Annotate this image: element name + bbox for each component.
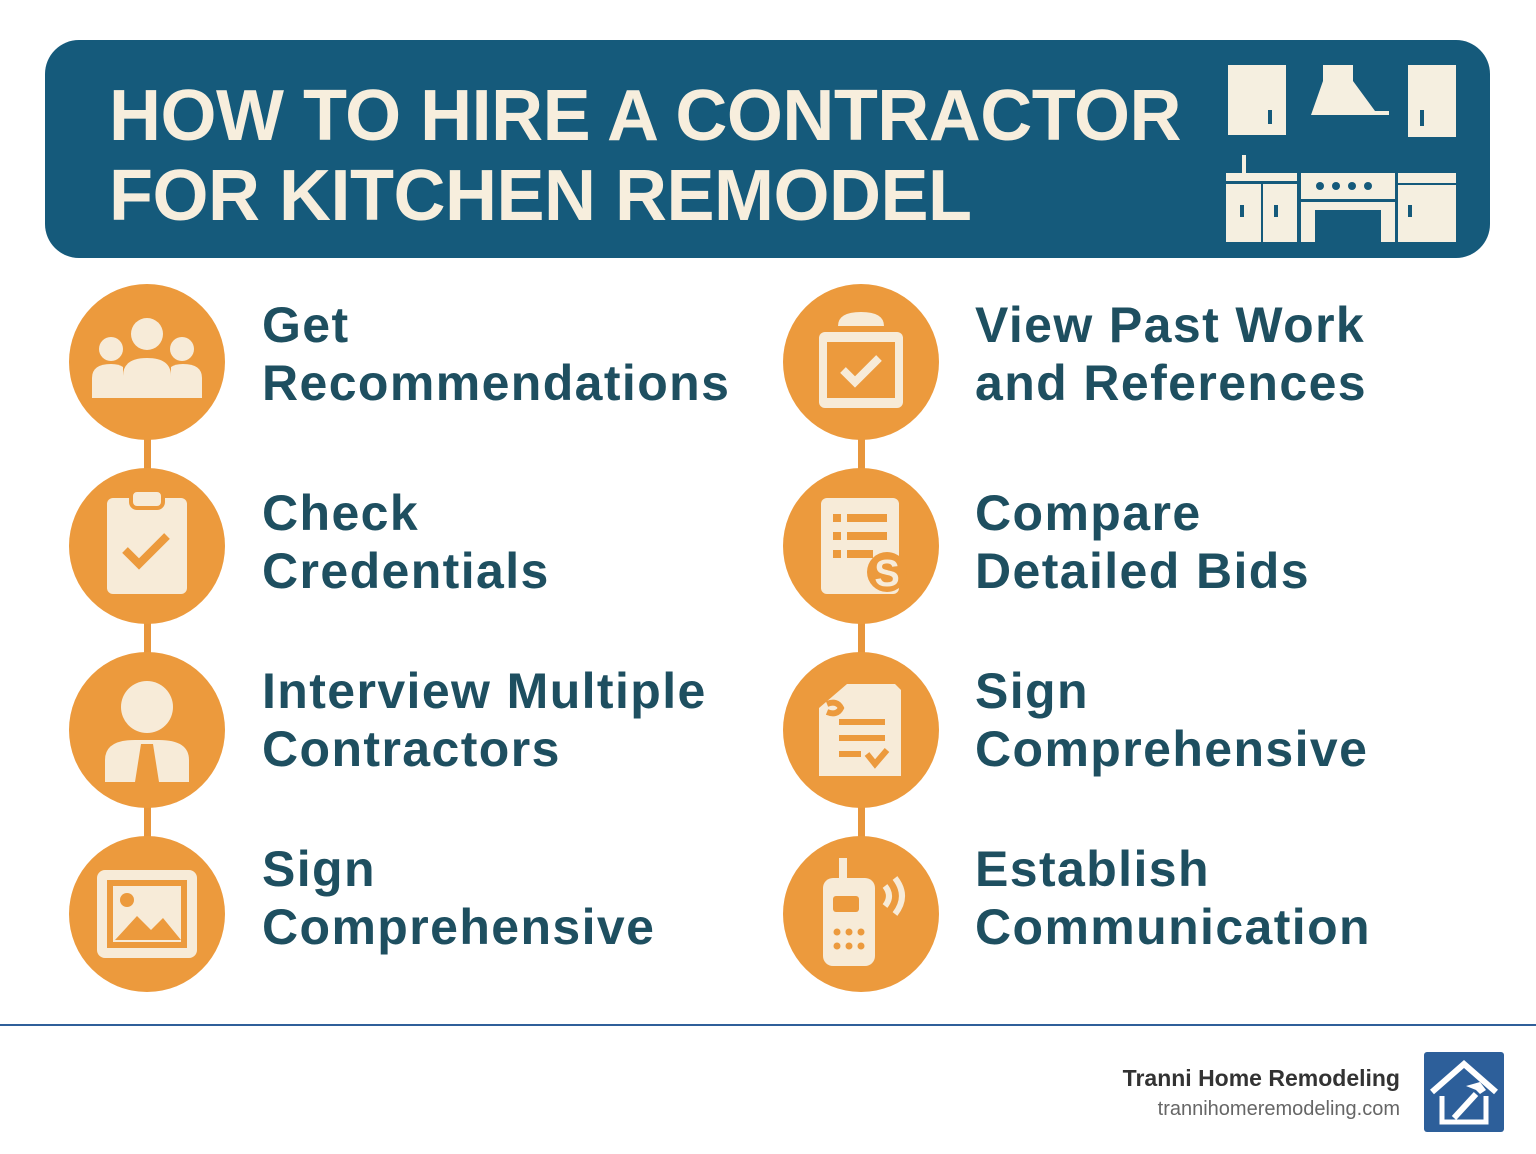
step 8 icon: radio <box>783 836 939 992</box>
step 2 icon: clipboard check <box>69 468 225 624</box>
header banner <box>45 40 1490 258</box>
step 4 text <box>262 841 655 955</box>
step 4 icon: picture <box>69 836 225 992</box>
step 8 text: Establish <box>975 841 1210 897</box>
step 6 icon: bid list <box>783 468 939 624</box>
step 7 text: Comprehensive <box>975 721 1368 777</box>
footer brand text: Tranni Home Remodeling <box>1123 1065 1400 1091</box>
step 4 text: Comprehensive <box>262 899 655 955</box>
step 8 text: Communication <box>975 899 1371 955</box>
step 6 icon: bid list: S <box>874 553 900 595</box>
step 5 text: View Past Work <box>975 297 1365 353</box>
step 3 text: Interview Multiple <box>262 663 707 719</box>
step 1 text: Get <box>262 297 350 353</box>
step 8 text <box>975 841 1371 955</box>
step 3 text: Contractors <box>262 721 561 777</box>
step 2 text: Credentials <box>262 543 550 599</box>
logo <box>1424 1052 1504 1132</box>
step 4 text: Sign <box>262 841 376 897</box>
footer divider <box>0 1024 1536 1026</box>
step 2 text <box>262 485 550 599</box>
footer brand text <box>1122 1065 1400 1120</box>
step 1 text <box>262 297 730 411</box>
step 3 icon: person <box>69 652 225 808</box>
step 5 text <box>975 297 1367 411</box>
step 1 text: Recommendations <box>262 355 730 411</box>
step 6 text <box>975 485 1310 599</box>
step 6 text: Detailed Bids <box>975 543 1310 599</box>
title: HOW TO HIRE A CONTRACTOR <box>109 76 1181 156</box>
step 6 text: Compare <box>975 485 1202 541</box>
connector lines <box>144 380 151 880</box>
step 2 text: Check <box>262 485 419 541</box>
title <box>109 76 1181 236</box>
step 5 text: and References <box>975 355 1367 411</box>
step 5 icon: checklist board <box>783 284 939 440</box>
step 7 text: Sign <box>975 663 1089 719</box>
step 1 icon: people <box>69 284 225 440</box>
icon: kitchen <box>1226 65 1456 242</box>
footer brand text: trannihomeremodeling.com <box>1158 1098 1400 1120</box>
step 7 text <box>975 663 1368 777</box>
title: FOR KITCHEN REMODEL <box>109 156 971 236</box>
step 7 icon: contract <box>783 652 939 808</box>
step 3 text <box>262 663 707 777</box>
